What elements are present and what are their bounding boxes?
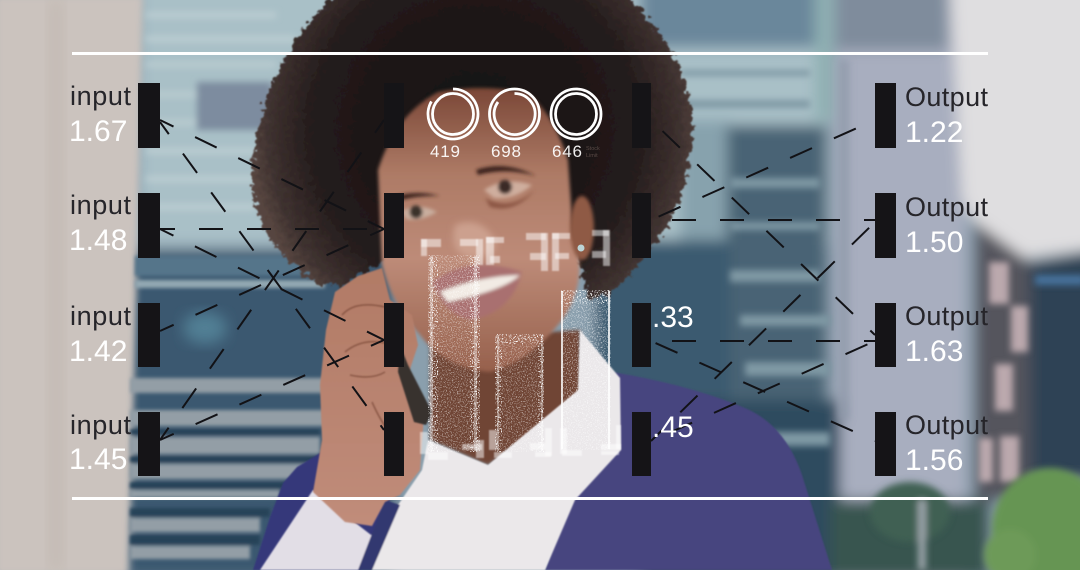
wall panel shading <box>48 0 64 570</box>
sky <box>950 0 1080 258</box>
input values: 1.42 <box>69 335 127 368</box>
dashed connectors: hidden layer to outputs <box>651 120 875 441</box>
gauge numbers <box>430 142 583 161</box>
bar 3 <box>561 290 611 450</box>
hidden layer values <box>652 301 694 444</box>
hidden layer values: .45 <box>652 411 694 444</box>
earring <box>578 244 584 252</box>
frame rules <box>72 52 988 500</box>
output values: 1.50 <box>905 226 963 259</box>
bar 1 and 2 inner edges <box>430 256 543 451</box>
ring gauges <box>428 89 601 139</box>
upper central building <box>140 0 830 245</box>
upper facade details <box>146 12 296 210</box>
face <box>378 88 579 372</box>
dashed connectors: inputs to hidden layer <box>160 120 384 440</box>
gauge 419 <box>428 89 478 139</box>
output values: 1.63 <box>905 335 963 368</box>
column bars <box>138 83 896 476</box>
gauge 646 <box>551 89 601 139</box>
lower central building <box>125 250 395 570</box>
photo: woman on the phone <box>252 0 832 570</box>
input labels: input <box>70 81 131 111</box>
gauge caption: Limit <box>586 153 598 159</box>
tower sheen and windows <box>838 60 1080 482</box>
phone <box>398 345 432 425</box>
nose <box>453 222 496 258</box>
output labels: Output <box>905 192 988 222</box>
ear <box>570 196 594 260</box>
gauge 698 <box>490 89 540 139</box>
bar 1 <box>428 255 480 452</box>
blazer <box>253 372 832 570</box>
output values: 1.22 <box>905 116 963 149</box>
bar 2 <box>495 334 544 452</box>
lower left facade stripes <box>130 256 330 559</box>
input values: 1.48 <box>69 224 127 257</box>
input labels: input <box>70 301 131 331</box>
pale tower <box>836 0 966 570</box>
trees <box>870 468 1080 570</box>
output labels <box>905 82 988 440</box>
input labels <box>70 81 131 440</box>
chart base fragments <box>420 425 621 460</box>
gauge numbers: 698 <box>491 142 522 161</box>
gauge caption: Stock <box>586 146 600 152</box>
output values <box>905 116 963 477</box>
chart top fragments <box>421 230 610 271</box>
stippled bar chart <box>420 230 621 460</box>
trees <box>830 500 990 570</box>
left wall <box>0 0 143 570</box>
output labels: Output <box>905 410 988 440</box>
input values: 1.67 <box>69 115 127 148</box>
input labels: input <box>70 190 131 220</box>
input values <box>69 115 127 476</box>
hand <box>313 268 424 526</box>
output values: 1.56 <box>905 444 963 477</box>
gauge numbers: 419 <box>430 142 461 161</box>
right facade stripes <box>680 70 830 446</box>
finger creases <box>342 305 388 430</box>
mouth <box>432 265 522 320</box>
output labels: Output <box>905 82 988 112</box>
afro hair <box>252 0 692 300</box>
bar 3 edges <box>561 291 610 449</box>
input values: 1.45 <box>69 443 127 476</box>
input labels: input <box>70 410 131 440</box>
dark right blocks <box>975 222 1030 500</box>
neck <box>430 330 580 465</box>
gauge caption <box>586 146 600 159</box>
shirt <box>260 330 621 570</box>
output labels: Output <box>905 301 988 331</box>
gauge numbers: 646 <box>552 142 583 161</box>
eyes and brows <box>396 166 536 220</box>
hidden layer values: .33 <box>652 301 694 334</box>
